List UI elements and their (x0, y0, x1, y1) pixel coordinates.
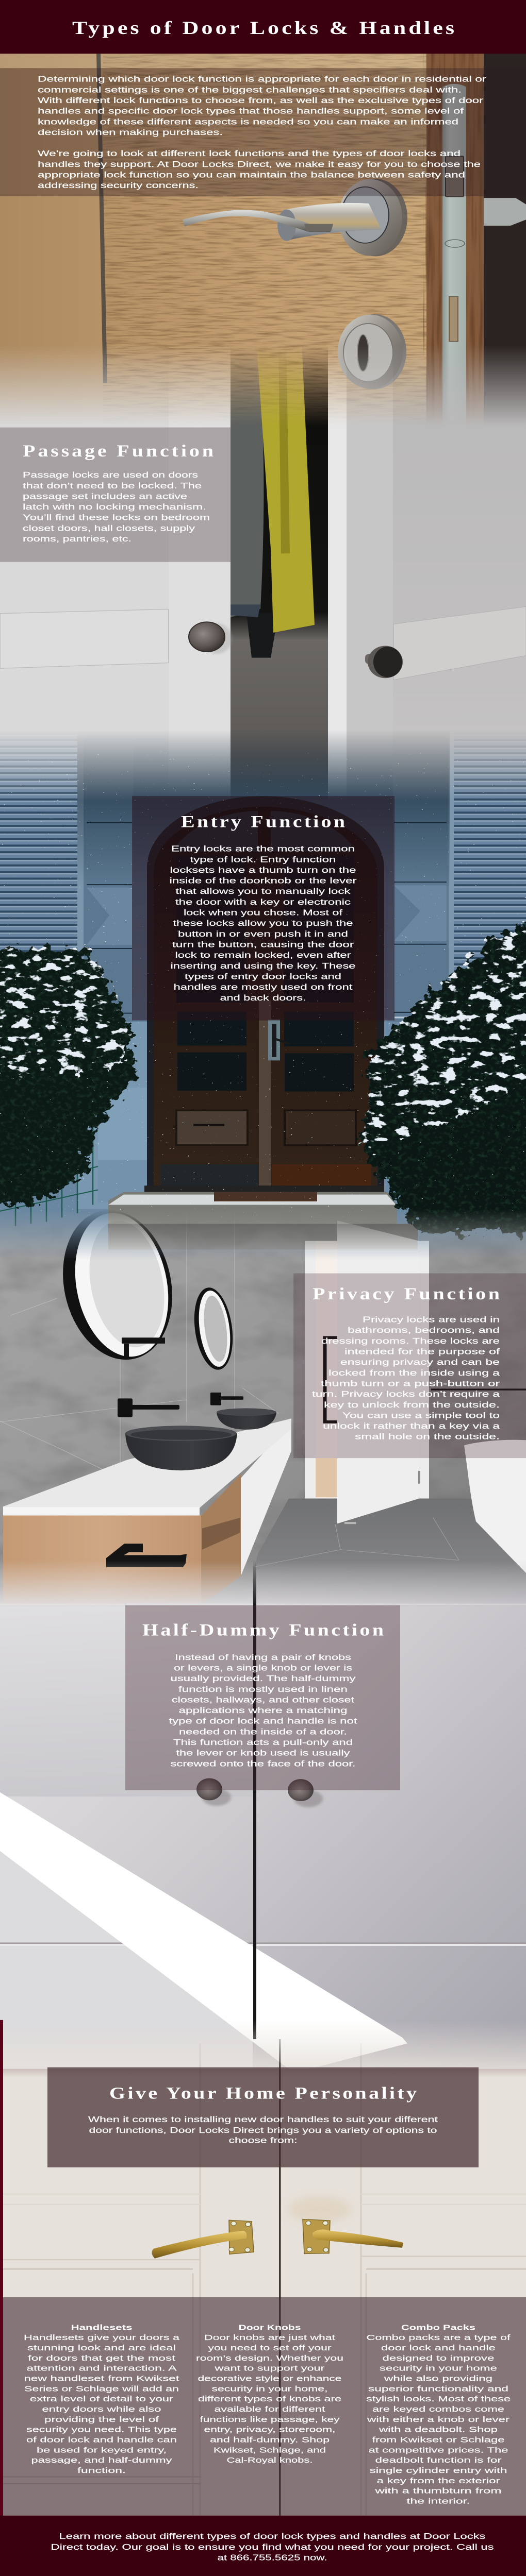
title bar (0, 0, 526, 54)
column: door knobs: Door Knobs (238, 2324, 301, 2332)
column: door knobs: available for different (215, 2405, 325, 2414)
plate maker mark (445, 240, 465, 247)
stone steps (108, 1185, 418, 1249)
heading: passage function: Passage Function (23, 441, 213, 460)
privacy text: bathrooms, bedrooms, and (348, 1326, 500, 1335)
entry text: these locks allow you to push the (173, 919, 353, 928)
panel line (0, 1942, 526, 1946)
lower wall (77, 1022, 425, 1209)
intro text: decision when making purchases. (38, 128, 223, 137)
rusticated pillars (87, 773, 449, 1022)
intro text (38, 74, 486, 190)
column: combo packs: at competitive prices. The (368, 2446, 508, 2454)
black towel rail (325, 1337, 337, 1422)
column: door knobs: Cal-Royal knobs. (226, 2456, 313, 2465)
entry text: inside of the doorknob or the lever (170, 876, 357, 885)
column: door knobs: you need to set off your (208, 2344, 332, 2352)
column: handlesets (24, 2324, 179, 2475)
entry door (147, 796, 384, 1205)
left snowy bush (0, 947, 137, 1205)
column: door knobs: Kwikset, Schlage, and (213, 2446, 326, 2454)
column: combo packs: security in your home (380, 2364, 497, 2372)
entry text: button in or even push it in and (178, 929, 348, 938)
intro text: knowledge of these different aspects is needed so you can make an informed (38, 117, 458, 126)
column: handlesets: attention and interaction. A (27, 2364, 177, 2372)
personality text: When it comes to installing new door handles to suit your different (88, 2115, 438, 2124)
intro text: Determining which door lock function is appropriate for each door in residential or (38, 74, 486, 83)
entry text: inserting and using the key. These (170, 961, 355, 970)
entry text: lock when you chose. Most of (184, 908, 342, 917)
privacy text: Privacy locks are used in (363, 1315, 500, 1324)
half-dummy text: or levers, a single knob or lever is (174, 1663, 352, 1672)
counter and drawers (3, 1418, 291, 1605)
fence (0, 1124, 98, 1226)
panel: entry function (132, 796, 395, 1021)
door mouldings (3, 2043, 526, 2516)
entry text: handles are mostly used on front (173, 982, 353, 992)
column: combo packs: with a thumbturn from (374, 2487, 501, 2495)
column: handlesets: security you need. This type (26, 2426, 177, 2434)
privacy text: intended for the purpose of (344, 1347, 500, 1356)
column: handlesets: Handlesets (71, 2324, 133, 2332)
photo: snowy blue facade with entry door (0, 724, 526, 1277)
intro text: addressing security concerns. (38, 181, 199, 190)
column: door knobs: and half-dummy. Shop (210, 2436, 330, 2444)
column: combo packs: with either a knob or lever (366, 2415, 510, 2424)
strike slot (449, 297, 458, 342)
photo: lever handle on oak door (0, 51, 526, 437)
column: combo packs: Combo Packs (401, 2324, 475, 2332)
column: door knobs: different types of knobs are (198, 2395, 341, 2403)
crack (279, 2039, 281, 2516)
column: handlesets: new handleset from Kwikset (24, 2375, 179, 2383)
privacy text: locked from the inside using a (328, 1368, 500, 1377)
lever handle (183, 203, 382, 241)
privacy text: dressing rooms. These locks are (321, 1336, 500, 1345)
cabinet handle (106, 1544, 187, 1567)
bathtub (464, 1440, 526, 1573)
column: combo packs: from Kwikset or Schlage (372, 2436, 505, 2444)
column: door knobs: Door knobs are just what (204, 2334, 336, 2342)
title: Types of Door Locks & Handles (72, 18, 454, 38)
half-dummy text: screwed onto the face of the door. (170, 1759, 355, 1768)
knob left (196, 1778, 231, 1806)
intro text: commercial settings is one of the biggest challenges that specifiers deal with. (38, 85, 462, 94)
footer call to action: Learn more about different types of door lock types and handles at Door Locks (59, 2532, 486, 2541)
half-dummy text: needed on the inside of a door. (179, 1727, 347, 1736)
falling snow (0, 749, 526, 1217)
entry text: type of lock. Entry function (190, 855, 336, 864)
column: combo packs: a key from the exterior (376, 2477, 500, 2485)
column: combo packs: are keyed combos come (372, 2405, 504, 2414)
passage text: You’ll find these locks on bedroom (23, 513, 210, 522)
passage text: latch with no locking mechanism. (23, 502, 206, 512)
column: handlesets: stunning look and are ideal (27, 2344, 176, 2352)
column: door knobs: decorative style or enhance (198, 2375, 342, 2383)
wall rail (431, 1388, 526, 1391)
column: combo packs: door lock and handle (381, 2344, 496, 2352)
small mirror (190, 1286, 237, 1371)
entry text: types of entry door locks and (185, 972, 341, 981)
column: handlesets: passage, and half-dummy (31, 2456, 172, 2465)
column: combo packs: single cylinder entry with (369, 2466, 507, 2475)
footer call to action: at 866.755.5625 now. (218, 2553, 327, 2562)
half-dummy text: type of door lock and handle is not (169, 1716, 357, 1725)
half-dummy text: closets, hallways, and other closet (172, 1695, 354, 1704)
entry text: and back doors. (220, 993, 306, 1002)
latch (446, 156, 464, 197)
column: handlesets: extra level of detail to your (30, 2395, 174, 2403)
privacy text: You can use a simple tool to (342, 1411, 500, 1420)
passage text: rooms, pantries, etc. (23, 534, 132, 544)
column: door knobs: want to support your (214, 2364, 325, 2372)
column: door knobs: room’s design. Whether you (196, 2354, 343, 2362)
half-dummy text: usually provided. The half-dummy (170, 1674, 356, 1683)
column: handlesets: function. (77, 2466, 126, 2475)
passage text: passage set includes an active (23, 492, 187, 501)
intro text: handles and specific door lock types that those handles support, some level of (38, 106, 464, 115)
column: handlesets: entry doors while also (42, 2405, 161, 2414)
column: combo packs: the interior. (406, 2497, 470, 2505)
entry text: the door with a key or electronic (175, 897, 351, 907)
light beam (0, 1792, 407, 2069)
personality text: choose from: (228, 2136, 297, 2145)
privacy text: ensuring privacy and can be (340, 1358, 500, 1367)
half-dummy text (169, 1652, 357, 1768)
photo: modern bathroom (0, 1204, 526, 1618)
column: handlesets: Handlesets give your doors a (24, 2334, 179, 2342)
half-dummy text: Instead of having a pair of knobs (175, 1652, 351, 1662)
keyhole rose (338, 314, 406, 389)
paint stains (289, 2197, 351, 2222)
personality text: door functions, Door Locks Direct brings you a variety of options to (89, 2125, 437, 2134)
heading: half-dummy function: Half-Dummy Function (142, 1620, 384, 1639)
entry text: Entry locks are the most common (171, 844, 355, 853)
panel: introduction (0, 68, 526, 196)
column: combo packs: while also providing (384, 2375, 492, 2383)
panel: passage function (0, 428, 231, 562)
column: handlesets: Series or Schlage will add an (24, 2385, 179, 2393)
entry text: locksets have a thumb turn on the (170, 866, 356, 875)
half-dummy text: function is mostly used in linen (178, 1684, 348, 1693)
heading: privacy function: Privacy Function (313, 1284, 500, 1303)
footer call to action: Direct today. Our goal is to ensure you find what you need for your project. Call us (51, 2542, 494, 2551)
right brass lever (303, 2219, 403, 2253)
faucets (118, 1393, 243, 1417)
left door panel (0, 609, 169, 668)
column: handlesets: of door lock and handle can (26, 2436, 177, 2444)
column: door knobs: functions like passage, key (200, 2415, 339, 2424)
closet gap (231, 341, 328, 809)
maroon strip left of last photo (0, 2020, 3, 2516)
photo: closet doors with knobs (0, 341, 526, 809)
intro text: appropriate lock function so you can maintain the balance between safety and (38, 170, 465, 179)
half-dummy text: the lever or knob used is usually (176, 1748, 350, 1757)
passage text: closet doors, hall closets, supply (23, 523, 195, 533)
photo: cream double doors with brass levers (3, 2018, 526, 2520)
darkening of upper facade (77, 738, 450, 874)
personality text (88, 2115, 438, 2145)
frame (328, 341, 347, 809)
large basin (125, 1426, 237, 1470)
intro text: handles they support. At Door Locks Direct, we make it easy for you to choose the (38, 160, 481, 169)
column: handlesets: be used for keyed entry, (37, 2446, 167, 2454)
panel: half-dummy function (125, 1605, 400, 1790)
column: door knobs: entry, privacy, storeroom, (204, 2426, 335, 2434)
passage text: that don’t need to be locked. The (23, 481, 202, 490)
column: handlesets: for doors that get the most (28, 2354, 176, 2362)
intro text: With different lock functions to choose from, as well as the exclusive types of door (38, 96, 483, 105)
column: combo packs: deadbolt function is for (375, 2456, 502, 2465)
right snowy bush (360, 916, 526, 1232)
half-dummy text: applications where a matching (178, 1706, 347, 1715)
entry text: that allows you to manually lock (175, 887, 351, 896)
column: combo packs: with a deadbolt. Shop (379, 2426, 498, 2434)
heading: entry function: Entry Function (181, 812, 345, 831)
entry text (170, 844, 357, 1002)
left brass lever (152, 2220, 254, 2259)
heading: give your home personality: Give Your Home Personality (109, 2083, 417, 2103)
knob left (189, 622, 232, 654)
column: handlesets: providing the level of (44, 2415, 159, 2424)
small basin (217, 1408, 276, 1430)
column: combo packs: stylish looks. Most of these (366, 2395, 511, 2403)
entry text: turn the button, causing the door (172, 940, 354, 949)
footer call to action (0, 2516, 526, 2576)
column: door knobs: security in your home, (211, 2385, 328, 2393)
column: combo packs (366, 2324, 511, 2505)
knob right (288, 1779, 323, 1807)
column: door knobs (196, 2324, 343, 2465)
large mirror (52, 1204, 184, 1366)
doorway (305, 1221, 429, 1523)
right door (393, 341, 526, 809)
passage text (23, 470, 210, 544)
panel: privacy function (293, 1273, 526, 1458)
intro text: We're going to look at different lock functions and the types of door locks and (38, 149, 461, 158)
knob right (365, 646, 403, 678)
far side lever (484, 198, 526, 226)
privacy text: turn. Privacy locks don’t require a (312, 1389, 500, 1399)
handle rose (338, 179, 407, 256)
passage text: Passage locks are used on doors (23, 470, 198, 480)
photo: white cupboard doors with light beam (0, 1558, 526, 2069)
privacy text (312, 1315, 500, 1441)
entry text: lock to remain locked, even after (175, 951, 351, 960)
column: combo packs: superior functionality and (368, 2385, 508, 2393)
privacy text: key to unlock from the outside. (324, 1400, 500, 1409)
privacy text: unlock it rather than a key via a (323, 1421, 500, 1431)
column: combo packs: designed to improve (383, 2354, 495, 2362)
panel: handle types (3, 2297, 526, 2516)
floor (242, 1499, 526, 1618)
privacy text: small hole on the outside. (355, 1432, 500, 1441)
half-dummy text: This function acts a pull-only and (173, 1738, 353, 1747)
marble wall (0, 1205, 526, 1614)
panel: give your home personality (47, 2067, 479, 2167)
privacy text: thumb turn or a push-button or (321, 1379, 500, 1388)
column: combo packs: Combo packs are a type of (366, 2334, 511, 2342)
centre gap (253, 1558, 256, 2039)
shutters (0, 741, 526, 981)
